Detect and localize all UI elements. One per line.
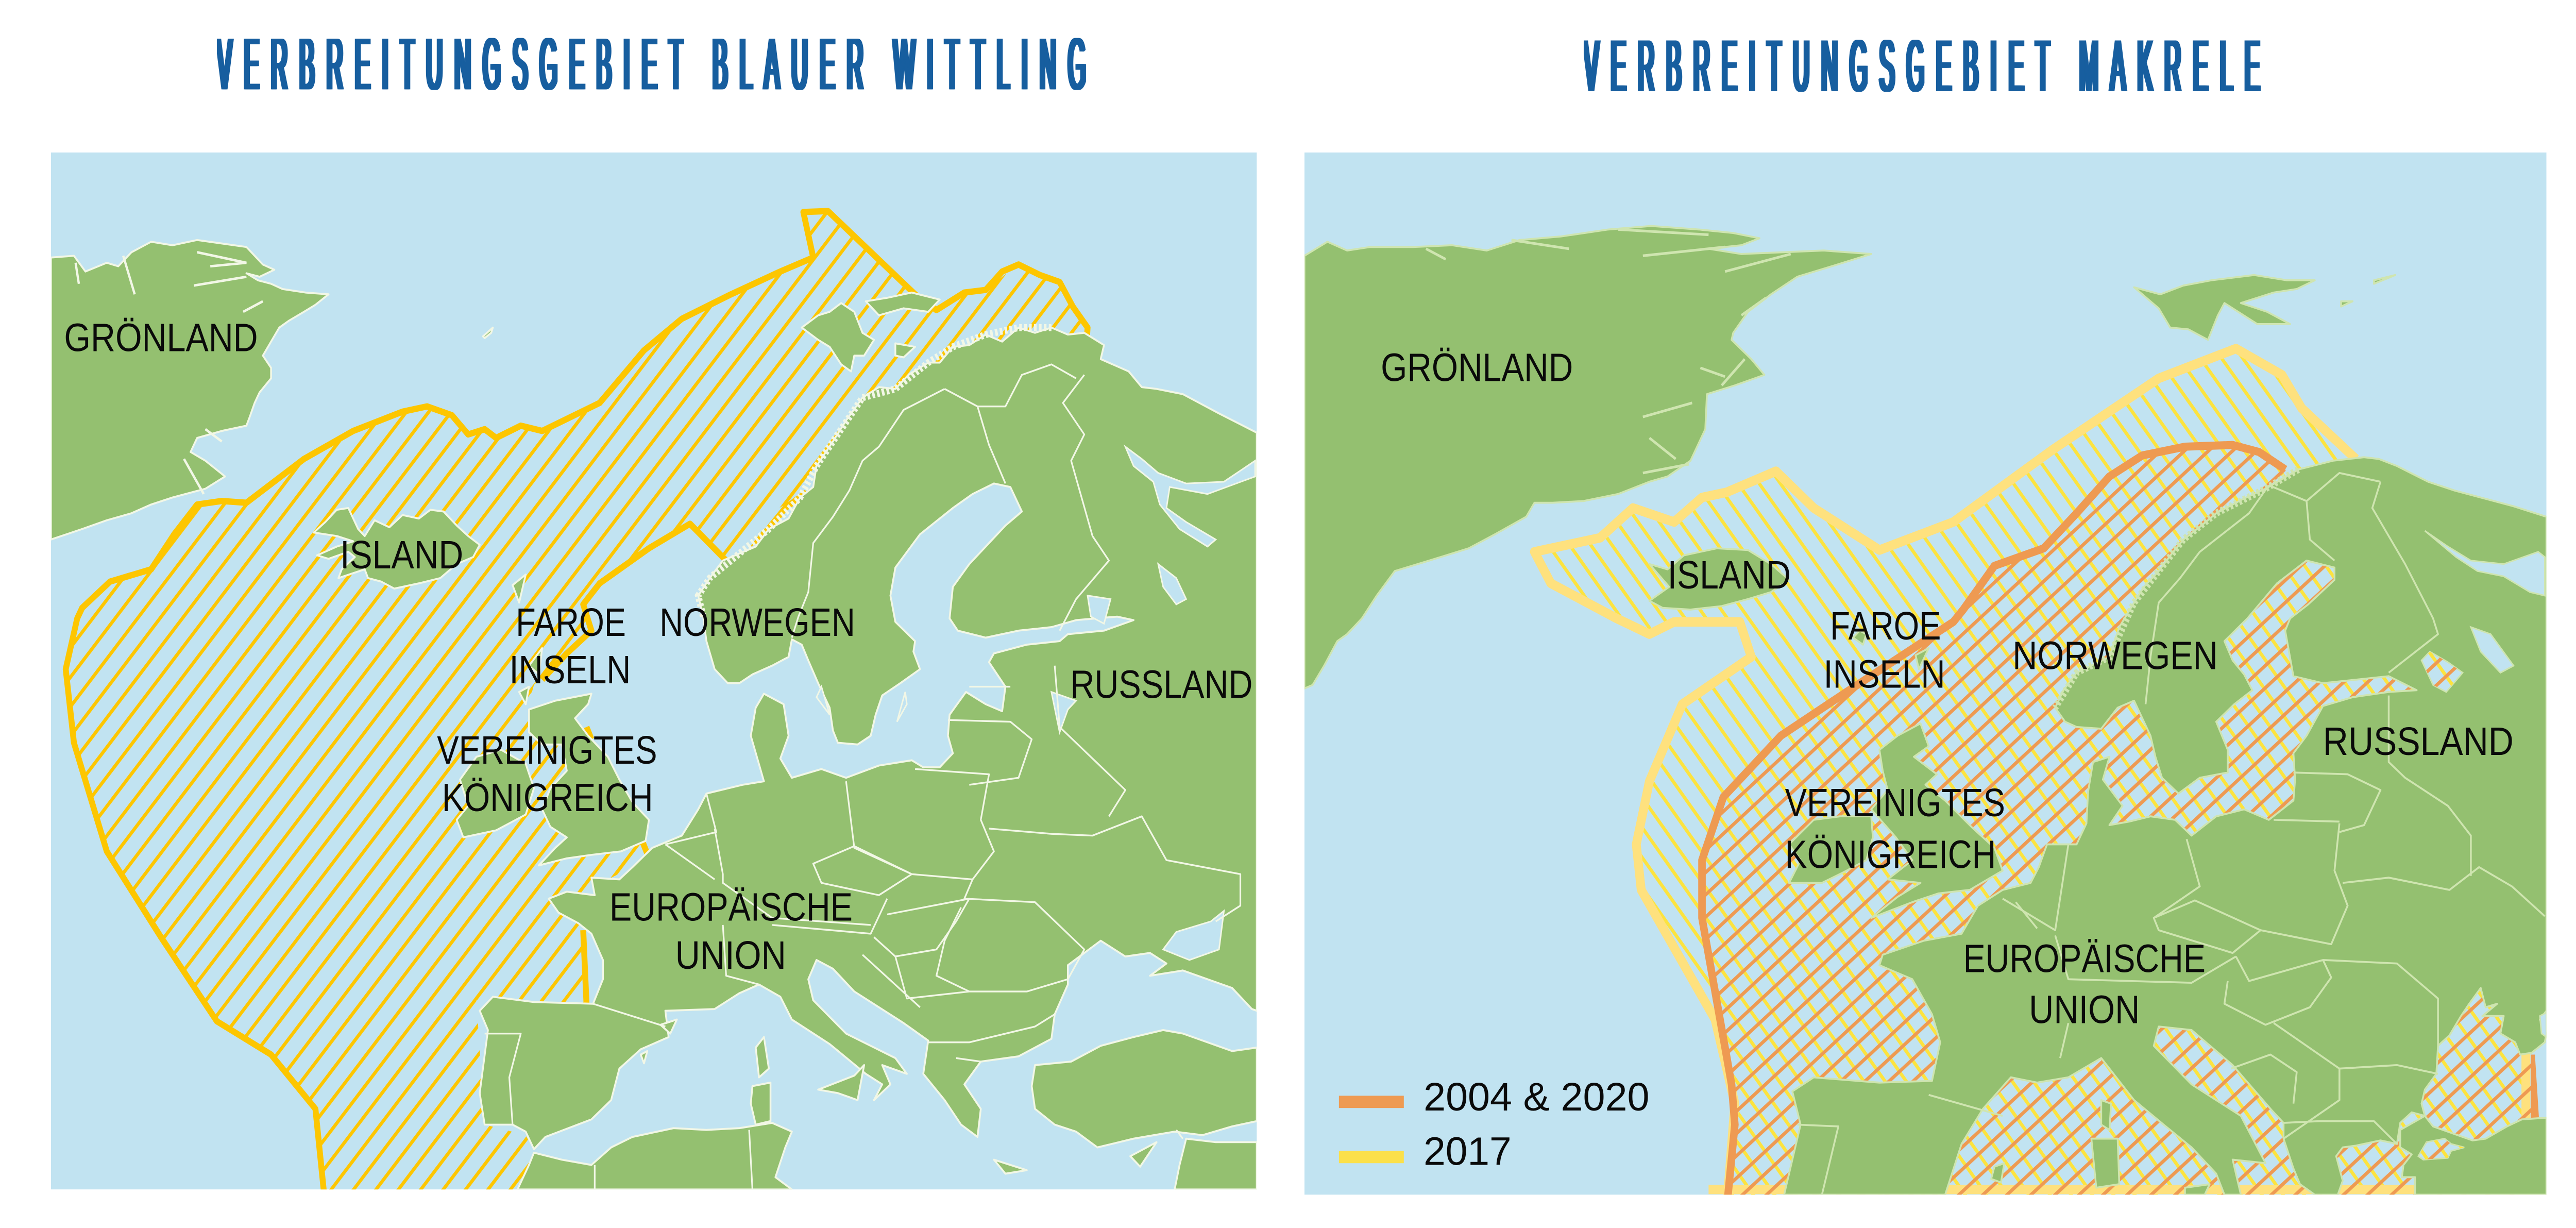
- label Königreich: KÖNIGREICH: [442, 776, 653, 819]
- legend: [1339, 1075, 1650, 1173]
- legend label 2017: 2017: [1423, 1130, 1512, 1173]
- east border in Black Sea: [2531, 1054, 2539, 1119]
- legend label 2004 and 2020: 2004 & 2020: [1423, 1075, 1650, 1119]
- panel: map blue whiting: [51, 153, 1257, 1209]
- Turkey: [2400, 1116, 2547, 1195]
- outline 2017: [1534, 348, 2530, 1209]
- label Inseln: INSELN: [1824, 652, 1945, 696]
- label Island: ISLAND: [1668, 553, 1791, 597]
- label Union: UNION: [2029, 987, 2140, 1032]
- Ireland: [456, 750, 534, 837]
- distribution area 2017 hatch: [1534, 348, 2523, 1209]
- Greenland: [1304, 226, 1871, 688]
- mainland Europe: [1784, 457, 2547, 1195]
- North Africa: [517, 1123, 792, 1189]
- mainland Europe: [480, 328, 1257, 1149]
- legend swatch 2017: [1339, 1151, 1404, 1163]
- label Faroe: FAROE: [516, 600, 626, 644]
- Mediterranean islands: [641, 1019, 1157, 1174]
- map labels left: [64, 315, 1252, 977]
- Faroe and Shetland: [513, 575, 542, 704]
- label Vereinigtes: VEREINIGTES: [437, 728, 657, 772]
- Svalbard: [802, 293, 940, 372]
- outline 2004 and 2020: [1702, 445, 2285, 1209]
- label Vereinigtes: VEREINIGTES: [1785, 781, 2005, 825]
- Greenland fjords: [76, 253, 263, 494]
- Norwegian coast fjords: [698, 328, 1052, 617]
- label Union: UNION: [675, 933, 786, 977]
- hatched distribution area blue whiting: [66, 211, 1088, 1209]
- land masses left: [51, 240, 1257, 1189]
- label Grönland: GRÖNLAND: [1381, 345, 1573, 390]
- map labels right: [1381, 345, 2514, 1032]
- Great Britain: [1871, 724, 2003, 918]
- country borders: [485, 364, 1241, 1189]
- Turkey: [1032, 1030, 1257, 1148]
- label Europäische: EUROPÄISCHE: [1963, 937, 2206, 981]
- legend swatch 2004 and 2020: [1339, 1096, 1404, 1108]
- label Faroe: FAROE: [1830, 604, 1941, 648]
- label Russland: RUSSLAND: [2323, 719, 2514, 764]
- Iceland: [1650, 548, 1789, 610]
- Norwegian coast fjords: [2055, 469, 2298, 708]
- Jan Mayen: [483, 328, 493, 338]
- label Norwegen: NORWEGEN: [2012, 633, 2218, 678]
- label Norwegen: NORWEGEN: [659, 600, 855, 644]
- label Grönland: GRÖNLAND: [64, 315, 258, 360]
- Iceland: [314, 508, 480, 588]
- label Königreich: KÖNIGREICH: [1785, 832, 1996, 877]
- label Russland: RUSSLAND: [1070, 663, 1252, 706]
- lakes and inland seas: [2425, 531, 2547, 1037]
- lakes and inland seas: [817, 447, 1255, 960]
- label Europäische: EUROPÄISCHE: [609, 885, 853, 929]
- title: mackerel distribution: VERBREITUNGSGEBIET MAKRELE: [1584, 25, 2272, 107]
- Mediterranean islands: [1991, 1100, 2210, 1195]
- Great Britain: [529, 694, 649, 865]
- label Inseln: INSELN: [510, 648, 631, 692]
- Middle East: [1175, 1139, 1257, 1189]
- label Island: ISLAND: [340, 533, 463, 577]
- Ireland: [1789, 816, 1873, 883]
- land masses right: [1304, 226, 2547, 1195]
- Svalbard: [2134, 275, 2395, 340]
- panel: map mackerel: [1304, 153, 2547, 1209]
- distribution area 2004 and 2020 hatch: [1702, 445, 2532, 1209]
- Greenland fjords: [1426, 229, 1791, 473]
- Greenland: [51, 240, 329, 540]
- country borders: [1798, 473, 2545, 1195]
- hatched inland waters: [2418, 652, 2464, 1159]
- title: blue whiting distribution: VERBREITUNGSGEBIET BLAUER WITTLING: [217, 23, 1098, 105]
- Faroe and Shetland: [1853, 631, 1929, 669]
- outline of distribution area: [66, 211, 1088, 1209]
